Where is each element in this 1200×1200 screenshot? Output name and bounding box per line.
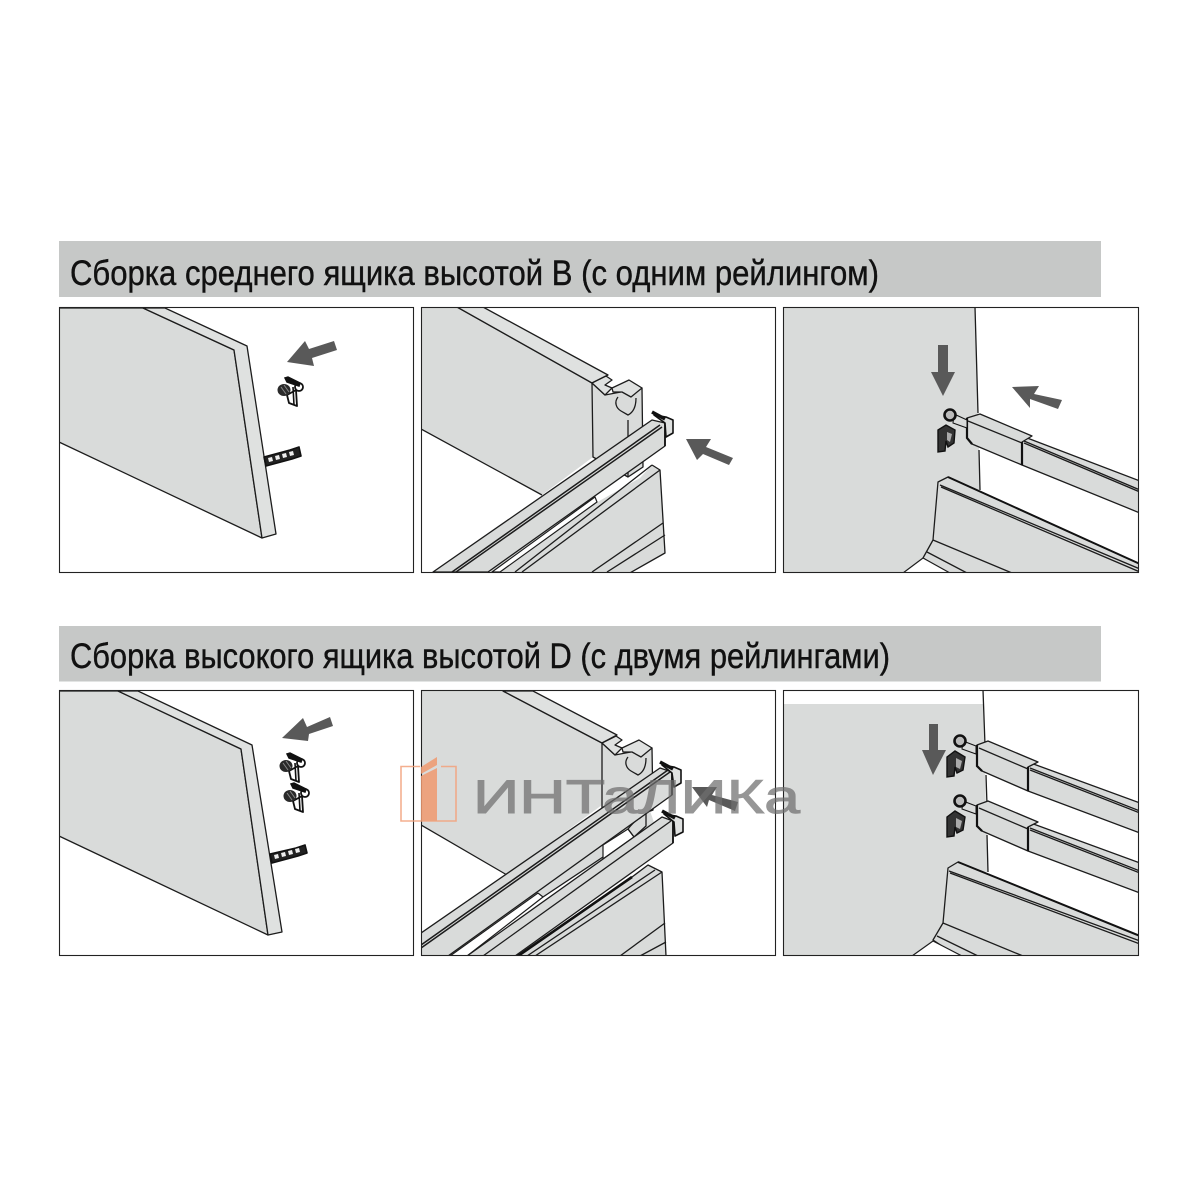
- icon: lower rail end clip: [662, 811, 683, 836]
- arrow: towards clip: [1012, 386, 1062, 409]
- panel: medium drawer step 3, rail fixed on the front: [783, 307, 1140, 575]
- corner end fitting: [601, 736, 654, 812]
- arrow: towards rail end: [686, 439, 733, 465]
- lower rail: [947, 796, 1140, 893]
- heading bar: medium drawer: [59, 241, 1101, 297]
- heading bar: medium drawer: Сборка среднего ящика высотой B (с одним рейлингом): [70, 254, 879, 293]
- icon: rail clip: [938, 410, 967, 452]
- icon: dowel: [270, 845, 307, 863]
- icon: dowel: [264, 447, 301, 466]
- panel: tall drawer step 2, two rails to front corner: [400, 691, 738, 956]
- panel: tall drawer step 1, front panel with fittings: [59, 691, 333, 935]
- panel: tall drawer step 3, rails fixed on the front: [783, 690, 1140, 958]
- upper rail: [400, 768, 672, 956]
- corner end fitting: [592, 376, 643, 477]
- drawer side: [923, 477, 1140, 575]
- arrow: towards rail ends: [692, 787, 738, 811]
- panel: medium drawer step 2, rail to front corner: [421, 307, 733, 574]
- icon: lower clip fitting: [284, 783, 309, 812]
- gap and window between rails: [450, 811, 655, 956]
- panel frames: [60, 308, 1138, 956]
- icon: rail end clip: [652, 412, 673, 437]
- watermark logo: [401, 757, 456, 821]
- panel: medium drawer step 1, front panel with fittings: [59, 308, 337, 538]
- rail: [433, 420, 665, 572]
- icon: upper clip fitting: [280, 753, 305, 782]
- heading bar: tall drawer: [59, 626, 1101, 682]
- drawer side: [933, 862, 1140, 958]
- heading bar: tall drawer: Сборка высокого ящика высотой D (с двумя рейлингами): [70, 637, 890, 676]
- rail: [1022, 436, 1140, 513]
- icon: clip fitting: [278, 377, 303, 406]
- lower drawer side: [518, 865, 666, 956]
- arrow: towards panel: [282, 717, 333, 741]
- lower drawer side: [490, 466, 664, 572]
- icon: upper rail end clip: [660, 762, 681, 787]
- lower rail: [467, 817, 673, 956]
- arrow: towards panel: [287, 341, 337, 366]
- upper rail: [947, 736, 1140, 833]
- arrow: down: [931, 345, 955, 396]
- watermark text: ИНТаЛИКа: [473, 770, 801, 823]
- arrow: down: [922, 724, 946, 775]
